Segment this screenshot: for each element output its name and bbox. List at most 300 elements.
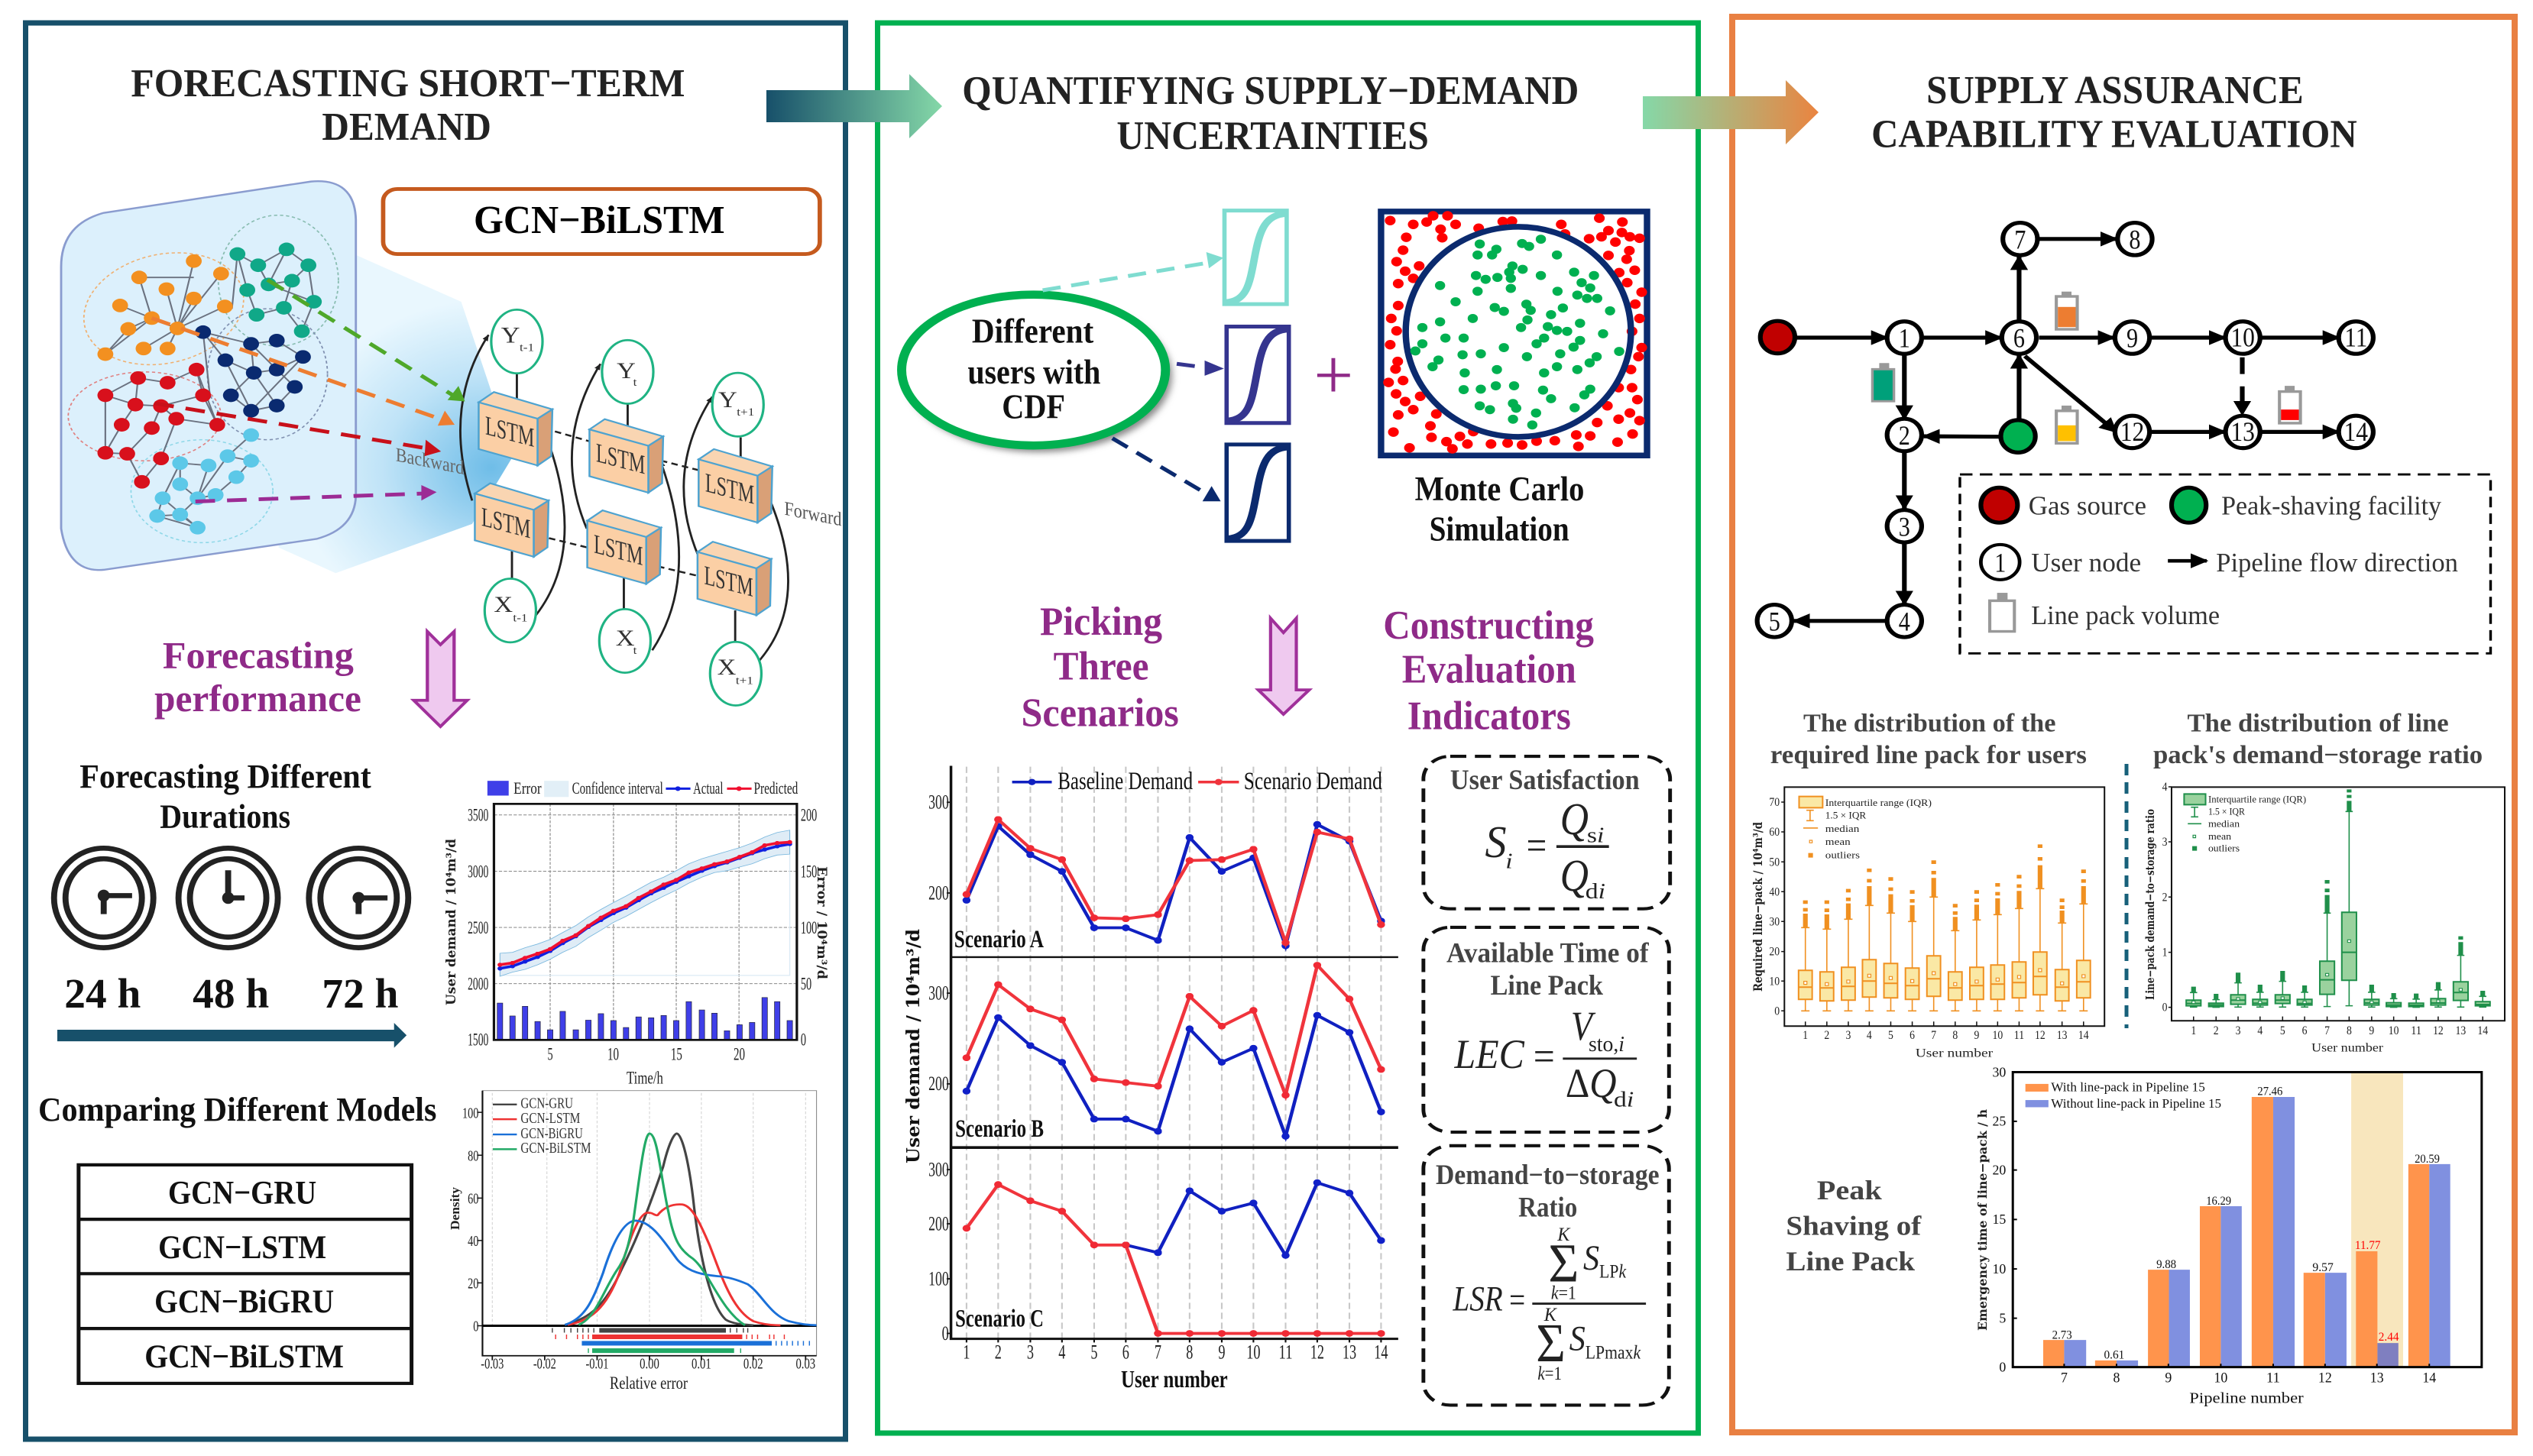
chart: forecast vs actual with error bars: 15 (671, 1045, 682, 1064)
box plot: required line pack (1769, 787, 2104, 1060)
model list table (79, 1165, 412, 1383)
series: scenario C (967, 1183, 1381, 1334)
arrow: down between headings (1258, 618, 1309, 714)
network legend (1960, 474, 2490, 653)
axis label: required line pack: Required line−pack / 10⁴m³/d (1751, 822, 1765, 992)
box plot: demand-storage ratio: 14 (2477, 1024, 2488, 1037)
chart: density of relative error: -0.03 (481, 1354, 504, 1372)
duration labels: 24 h (64, 971, 141, 1018)
chart: scenario demand line charts: 11 (1278, 1342, 1293, 1364)
BiLSTM network diagram: LSTM (596, 437, 645, 480)
title: forecasting short-term demand (131, 62, 685, 149)
box plot: required line pack: 11 (2014, 1029, 2024, 1042)
BiLSTM network diagram: Backward (396, 444, 464, 479)
model list table: GCN−BiLSTM (144, 1338, 344, 1375)
chart: scenario demand line charts: 200 (928, 882, 949, 904)
network legend: Line pack volume (2031, 601, 2220, 630)
icon: line pack battery yellow (2056, 406, 2078, 443)
panel: quantifying supply-demand uncertainties (877, 23, 1698, 1433)
chart legend: Scenario Demand (1244, 767, 1382, 794)
chart: forecast vs actual with error bars: 150 (801, 862, 817, 882)
density legend: GCN-GRU (520, 1094, 573, 1111)
formula card: demand-to-storage ratio: k=1 (1537, 1363, 1562, 1383)
chart: density of relative error: 40 (468, 1232, 478, 1250)
chart: scenario demand line charts: 4 (1058, 1342, 1065, 1364)
heading: picking three scenarios: Scenarios (1022, 691, 1179, 736)
bar chart: emergency time of line pack: 14 (2422, 1369, 2436, 1386)
box plot: required line pack: 6 (1909, 1029, 1915, 1042)
panel 3 network section (1757, 68, 2490, 653)
series: scenario A (967, 820, 1381, 946)
chart legend (487, 780, 798, 798)
bar chart: emergency time of line pack: 30 (1992, 1066, 2006, 1080)
bar chart: emergency time of line pack: 20.59 (2415, 1152, 2440, 1166)
BiLSTM network diagram: t+1 (737, 406, 754, 418)
heading: constructing evaluation indicators: Indicators (1407, 694, 1571, 739)
formula card: available time of line pack: V (1571, 1003, 1596, 1049)
callout: different users with CDF: users with (967, 353, 1100, 391)
network legend: Pipeline flow direction (2216, 548, 2458, 578)
formula card: demand-to-storage ratio: S (1583, 1238, 1599, 1277)
chart: scenario demand line charts: 300 (928, 983, 949, 1005)
label: Monte Carlo simulation: Monte Carlo (1415, 470, 1584, 508)
node numbers: 11 (2344, 323, 2367, 353)
chart: scenario demand line charts: 9 (1218, 1342, 1226, 1364)
box plot: required line pack: 40 (1769, 885, 1780, 898)
chart: forecast vs actual with error bars: 0 (801, 1031, 806, 1050)
box plot: demand-storage ratio: 13 (2456, 1024, 2466, 1037)
box plot: demand-storage ratio: 1 (2162, 946, 2167, 959)
box plot: required line pack: 0 (1774, 1005, 1780, 1018)
bar chart: emergency time of line pack: 25 (1992, 1115, 2006, 1129)
box plot: required line pack: 50 (1769, 856, 1780, 869)
formula card: user satisfaction (1424, 756, 1670, 909)
box plot: demand-storage ratio: 2 (2214, 1024, 2219, 1037)
BiLSTM network diagram: LSTM (705, 467, 754, 510)
icon: line pack battery orange (2056, 292, 2078, 329)
bar chart: emergency time of line pack (1992, 1066, 2482, 1406)
box plot: demand-storage ratio: 8 (2347, 1024, 2352, 1037)
axis label: demand-to-storage ratio: Line−pack demand−to−storage ratio (2143, 809, 2157, 1000)
heading: comparing different models: Comparing Different Models (38, 1090, 436, 1128)
bar chart: emergency time of line pack: 13 (2370, 1369, 2384, 1386)
box plot: required line pack: 4 (1867, 1029, 1872, 1042)
chart: density of relative error: 0.01 (692, 1354, 711, 1372)
duration labels (64, 971, 398, 1018)
box plot: demand-storage ratio: 4 (2162, 781, 2167, 794)
label box: GCN-BiLSTM (383, 189, 820, 254)
node numbers: 1 (1899, 324, 1910, 354)
chart: forecast vs actual with error bars: 2500 (468, 919, 488, 937)
box plot: demand-storage ratio: 12 (2433, 1024, 2444, 1037)
panel 2 lower content (928, 756, 1670, 1405)
title: quantifying supply-demand uncertainties: QUANTIFYING SUPPLY−DEMAND (962, 69, 1579, 113)
box plot: demand-storage ratio (2162, 781, 2505, 1054)
Monte Carlo simulation square (1381, 212, 1647, 455)
series: scenario B (967, 966, 1381, 1136)
scenario labels (954, 925, 1044, 1332)
bar chart: emergency time of line pack: 20 (1992, 1163, 2006, 1178)
BiLSTM network diagram: LSTM (594, 529, 643, 571)
pipeline network flow arrows (1794, 239, 2339, 621)
arrow: duration timeline (57, 1023, 407, 1048)
icon: line pack battery green (1872, 363, 1894, 401)
bar chart: emergency time of line pack: 10 (2214, 1369, 2227, 1386)
chart legend: Predicted (753, 780, 798, 798)
chart: density of relative error: 20 (468, 1274, 478, 1292)
icon: line pack battery red (2279, 386, 2301, 423)
callout: different users with CDF: Different (972, 312, 1093, 351)
BiLSTM network diagram: LSTM (481, 501, 530, 545)
label box: GCN-BiLSTM: GCN−BiLSTM (474, 199, 725, 242)
bar chart: emergency time of line pack: 15 (1992, 1212, 2006, 1227)
chart legend: Actual (693, 780, 724, 798)
icon: clock 72 h (309, 848, 408, 948)
formula card: user satisfaction: User Satisfaction (1450, 764, 1640, 795)
chart: forecast vs actual with error bars: 5 (547, 1045, 553, 1064)
heading: picking three scenarios: Three (1054, 644, 1149, 689)
formula card: demand-to-storage ratio: Ratio (1518, 1192, 1577, 1223)
chart legend: Error (513, 780, 542, 798)
bar value labels: 9.57 (2312, 1260, 2334, 1274)
heading: peak shaving of line pack (1786, 1175, 1922, 1276)
title: quantifying supply-demand uncertainties (962, 69, 1579, 158)
cone of light from graph to LSTM network (278, 255, 513, 573)
heading: forecasting performance (154, 633, 361, 720)
axis label: emergency time: Emergency time of line−pack / h (1975, 1109, 1990, 1331)
formula card: demand-to-storage ratio: Σ (1536, 1312, 1566, 1374)
box plot: required line pack: 10 (1769, 975, 1780, 988)
density legend: GCN-LSTM (520, 1109, 580, 1127)
node numbers (1769, 225, 2368, 637)
axis label: error: Error / 10⁴m³/d (814, 866, 829, 979)
node numbers: 12 (2120, 417, 2144, 447)
chart: forecast vs actual with error bars: 2000 (468, 975, 488, 994)
box plot legend: Interquartile range (IQR) (1825, 798, 1932, 808)
node numbers: 4 (1899, 607, 1910, 637)
box plot: required line pack: 20 (1769, 946, 1780, 958)
heading: constructing evaluation indicators: Constructing (1383, 603, 1594, 648)
label: Monte Carlo simulation: Simulation (1430, 510, 1569, 548)
bar value labels: 2.44 (2379, 1330, 2399, 1344)
chart: forecast vs actual with error bars: 100 (801, 919, 817, 937)
icon: CDF curve teal (1224, 211, 1287, 304)
title: forecasting short-term demand: FORECASTING SHORT−TERM (131, 62, 685, 105)
box plot legend: mean (1825, 836, 1851, 847)
rug marks (552, 1328, 809, 1353)
formula card: demand-to-storage ratio: LSR (1453, 1279, 1503, 1318)
chart: scenario demand line charts: 2 (995, 1342, 1002, 1364)
box plot: required line pack: 13 (2057, 1029, 2068, 1042)
heading: picking three scenarios (1022, 600, 1179, 736)
dashed arrows from clusters to LSTM (152, 280, 465, 501)
heading: picking three scenarios: Picking (1040, 600, 1162, 644)
formula card: available time of line pack (1424, 927, 1669, 1132)
chart: scenario demand line charts: 300 (928, 792, 949, 814)
bar value labels: 9.88 (2156, 1257, 2176, 1271)
node numbers: 13 (2230, 417, 2255, 447)
bar chart: emergency time of line pack: 11 (2266, 1369, 2280, 1386)
box plot: required line pack: 10 (1992, 1029, 2003, 1042)
label: Monte Carlo simulation (1415, 470, 1584, 548)
chart: forecast vs actual with error bars: 1500 (468, 1031, 488, 1050)
chart: scenario demand line charts: 14 (1374, 1342, 1388, 1364)
box plot legend: median (2208, 819, 2240, 830)
node numbers: 9 (2126, 324, 2138, 354)
chart: scenario demand line charts: 7 (1155, 1342, 1161, 1364)
bar value labels: 2.73 (2052, 1328, 2072, 1341)
chart: scenario demand line charts: 1 (963, 1342, 970, 1364)
network legend: User node (2031, 548, 2141, 578)
box plot legend: 1.5 × IQR (2208, 807, 2245, 817)
chart: scenario demand line charts: 8 (1186, 1342, 1193, 1364)
density legend: GCN-BiGRU (520, 1124, 583, 1141)
formula card: demand-to-storage ratio: LPk (1599, 1260, 1627, 1282)
BiLSTM network diagram: t (633, 645, 637, 657)
heading: constructing evaluation indicators (1383, 603, 1594, 739)
formula card: user satisfaction: i (1505, 849, 1513, 873)
BiLSTM network diagram: Forward (784, 498, 841, 531)
icon: clock 48 h (179, 848, 278, 948)
BiLSTM network diagram: X (616, 626, 634, 651)
box plot: required line pack: User number (1916, 1047, 1994, 1060)
box plot legend: median (1825, 823, 1859, 834)
panel: supply assurance capability evaluation (1732, 17, 2515, 1432)
formula card: demand-to-storage ratio: K (1543, 1304, 1558, 1325)
chart: density of relative error: 0 (473, 1317, 478, 1335)
BiLSTM network diagram (396, 309, 841, 705)
chart: scenario demand line charts: 12 (1310, 1342, 1324, 1364)
panel 3 peak shaving section (1786, 1066, 2482, 1406)
chart legend (1012, 767, 1382, 794)
box plot legend: outliers (2208, 843, 2240, 853)
box plot: demand-storage ratio: User number (2311, 1042, 2383, 1054)
chart: forecast vs actual with error bars: 20 (734, 1045, 745, 1064)
formula card: demand-to-storage ratio: = (1509, 1280, 1525, 1319)
pipeline network nodes (1757, 223, 2373, 637)
duration labels: 72 h (322, 971, 398, 1018)
arrow: forecasting to uncertainty (766, 74, 942, 138)
network legend: Gas source (2029, 491, 2146, 520)
box plot legend: mean (2208, 831, 2231, 842)
box plot: demand-storage ratio: 4 (2257, 1024, 2263, 1037)
heading: distribution of required line pack: The distribution of the (1803, 709, 2055, 737)
heading: distribution of required line pack (1770, 709, 2087, 768)
title: supply assurance capability evaluation: SUPPLY ASSURANCE (1926, 68, 2304, 112)
BiLSTM network diagram: Y (718, 387, 737, 412)
BiLSTM network diagram: Y (501, 323, 520, 348)
panel 1 upper content (61, 62, 841, 726)
node numbers: 14 (2344, 417, 2368, 447)
chart: density of relative error: 100 (462, 1104, 478, 1121)
chart: density of relative error: 0.02 (743, 1354, 763, 1372)
heading: distribution of demand-storage ratio (2153, 709, 2483, 768)
bar chart: emergency time of line pack: 0 (1999, 1360, 2006, 1375)
duration labels: 48 h (193, 971, 269, 1018)
box plot: required line pack: 12 (2035, 1029, 2046, 1042)
panel 2 upper content (902, 69, 1647, 739)
chart: density of relative error: -0.01 (585, 1354, 608, 1372)
node numbers: 5 (1769, 607, 1780, 637)
box plot: required line pack: 3 (1846, 1029, 1851, 1042)
BiLSTM network diagram: X (717, 655, 736, 680)
title: quantifying supply-demand uncertainties: UNCERTAINTIES (1116, 114, 1429, 158)
density legend: GCN-BiLSTM (520, 1139, 591, 1157)
formula card: demand-to-storage ratio: k=1 (1551, 1283, 1576, 1303)
heading: distribution of required line pack: required line pack for users (1770, 740, 2087, 768)
BiLSTM network diagram: t-1 (513, 612, 527, 624)
chart: forecast vs actual with error bars: Time/h (627, 1069, 663, 1088)
box plot: required line pack: 60 (1769, 826, 1780, 839)
chart: scenario demand line charts: 6 (1122, 1342, 1129, 1364)
bar value labels (2052, 1084, 2440, 1361)
box plot: demand-storage ratio: 6 (2302, 1024, 2308, 1037)
chart: density of relative error: 0.00 (640, 1354, 659, 1372)
chart: scenario demand line charts: 300 (928, 1160, 949, 1181)
heading: peak shaving of line pack: Peak (1817, 1175, 1882, 1205)
chart: forecast vs actual with error bars: 50 (801, 975, 811, 994)
heading: peak shaving of line pack: Shaving of (1786, 1210, 1922, 1241)
chart: forecast vs actual with error bars: 3000 (468, 862, 488, 882)
icon: CDF curve navy (1226, 445, 1289, 541)
box plot: required line pack: 7 (1931, 1029, 1936, 1042)
bar chart: emergency time of line pack: 8 (2114, 1369, 2120, 1386)
icon: CDF curve purple (1226, 327, 1289, 423)
box plot: required line pack: 2 (1824, 1029, 1829, 1042)
scenario labels: Scenario C (955, 1305, 1044, 1332)
chart: scenario demand line charts: 10 (1246, 1342, 1261, 1364)
box plot: demand-storage ratio: 3 (2162, 836, 2167, 849)
bar chart: emergency time of line pack: 7 (2061, 1369, 2068, 1386)
formula card: demand-to-storage ratio: K (1556, 1224, 1571, 1244)
box plot: required line pack: 14 (2078, 1029, 2089, 1042)
title: supply assurance capability evaluation: CAPABILITY EVALUATION (1871, 112, 2357, 156)
chart: density of relative error: 80 (468, 1147, 478, 1164)
bar chart: emergency time of line pack: Without line-pack in Pipeline 15 (2051, 1096, 2221, 1111)
box plot: demand-storage ratio: 11 (2411, 1024, 2421, 1037)
formula card: demand-to-storage ratio: S (1569, 1318, 1586, 1357)
box plot: demand-storage ratio: 2 (2162, 891, 2167, 904)
arrow: down to forecasting performance (413, 632, 467, 726)
formula card: demand-to-storage ratio (1424, 1146, 1669, 1405)
box plot: required line pack: 70 (1769, 796, 1780, 809)
BiLSTM network diagram: LSTM (485, 410, 534, 453)
box plot: required line pack: 5 (1888, 1029, 1893, 1042)
node numbers: 10 (2230, 323, 2255, 353)
chart: scenario demand line charts: 13 (1343, 1342, 1356, 1364)
bar value labels: 16.29 (2206, 1194, 2231, 1208)
bar value labels: 27.46 (2257, 1084, 2282, 1098)
formula card: demand-to-storage ratio: Σ (1548, 1233, 1579, 1294)
formula card: user satisfaction: = (1527, 822, 1547, 869)
axis label: user demand scenarios: User demand / 10⁴m³/d (903, 929, 924, 1163)
heading: peak shaving of line pack: Line Pack (1786, 1246, 1915, 1276)
formula card: user satisfaction: S (1485, 817, 1507, 867)
arrow: uncertainty to evaluation (1643, 80, 1819, 144)
chart: scenario demand line charts: 5 (1090, 1342, 1098, 1364)
formula card: user satisfaction: Q (1560, 794, 1589, 845)
callout: different users with CDF (902, 295, 1172, 452)
chart legend: Baseline Demand (1058, 767, 1193, 794)
title: supply assurance capability evaluation (1871, 68, 2357, 156)
formula card: available time of line pack: = (1534, 1033, 1555, 1079)
chart: density of relative error: -0.02 (533, 1354, 556, 1372)
formula card: available time of line pack: di (1614, 1087, 1634, 1111)
node numbers: 7 (2014, 225, 2026, 255)
chart: scenario demand line charts: User number (1121, 1366, 1228, 1393)
chart: forecast vs actual with error bars: 10 (607, 1045, 619, 1064)
box plot: demand-storage ratio: 9 (2369, 1024, 2374, 1037)
box plot: demand-storage ratio: Interquartile range (IQR) (2208, 794, 2306, 805)
callout: different users with CDF: CDF (1002, 388, 1065, 426)
chart: density of relative error (462, 1091, 817, 1393)
node numbers: 3 (1899, 513, 1910, 542)
formula card: available time of line pack: ΔQ (1566, 1060, 1617, 1106)
bar chart: emergency time of line pack: 10 (1992, 1262, 2006, 1276)
chart: scenario demand line charts: 100 (928, 1268, 949, 1290)
formula card: user satisfaction: si (1587, 823, 1604, 847)
model list table: GCN−GRU (168, 1175, 316, 1212)
panel 1 lower content (38, 757, 817, 1393)
box plot legend: outliers (1825, 850, 1860, 860)
chart: scenario demand line charts: 0 (942, 1323, 949, 1344)
panel 3 box plot section (1769, 709, 2505, 1060)
chart: scenario demand line charts: 200 (928, 1073, 949, 1095)
chart: forecast vs actual with error bars: 200 (801, 806, 817, 825)
network legend: 1 (1994, 548, 2006, 578)
model list table: GCN−BiGRU (154, 1284, 334, 1320)
icon: clock 24 h (54, 848, 154, 948)
formula card: available time of line pack: sto,i (1589, 1031, 1624, 1056)
heading: forecasting different durations (79, 757, 371, 836)
formula card: user satisfaction: di (1586, 879, 1605, 903)
BiLSTM network diagram: t (633, 377, 637, 389)
bar value labels: 11.77 (2355, 1238, 2381, 1252)
node numbers: 8 (2129, 225, 2141, 255)
chart: density of relative error: 60 (468, 1189, 478, 1207)
heading: forecasting performance: Forecasting (163, 633, 354, 677)
dashed arrows to CDF curves (1043, 252, 1224, 501)
title: forecasting short-term demand: DEMAND (322, 105, 491, 149)
BiLSTM network diagram: t-1 (520, 341, 534, 354)
chart: forecast vs actual with error bars: 3500 (468, 806, 488, 825)
BiLSTM network diagram: Y (617, 358, 636, 383)
heading: forecasting performance: performance (154, 677, 361, 720)
heading: constructing evaluation indicators: Evaluation (1402, 648, 1576, 692)
heading: forecasting different durations: Durations (160, 798, 290, 836)
box plot legend (2184, 794, 2306, 853)
box plot: required line pack: 1 (1803, 1029, 1808, 1042)
box plot: required line pack: 30 (1769, 915, 1780, 928)
box plot: demand-storage ratio: 3 (2236, 1024, 2240, 1037)
chart: density of relative error: Relative error (610, 1374, 688, 1393)
formula card: available time of line pack: Line Pack (1491, 969, 1603, 1001)
bar chart legend (2026, 1080, 2221, 1111)
chart: density of relative error: 0.03 (795, 1354, 815, 1372)
chart legend: Confidence interval (572, 780, 663, 798)
box plot legend (1799, 797, 1932, 860)
network legend: Peak-shaving facility (2221, 491, 2441, 520)
bar chart legend: With line-pack in Pipeline 15 (2051, 1080, 2205, 1094)
formula card: available time of line pack: Available Time of (1446, 937, 1649, 969)
bar chart: emergency time of line pack: 5 (1999, 1311, 2006, 1326)
box plot: demand-storage ratio: 0 (2162, 1001, 2167, 1014)
formula card: demand-to-storage ratio: LPmaxk (1586, 1342, 1641, 1363)
panel: forecasting short-term demand (26, 23, 845, 1439)
bar chart: emergency time of line pack: 9 (2165, 1369, 2172, 1386)
box plot: required line pack: 8 (1952, 1029, 1958, 1042)
scenario labels: Scenario A (954, 925, 1044, 953)
